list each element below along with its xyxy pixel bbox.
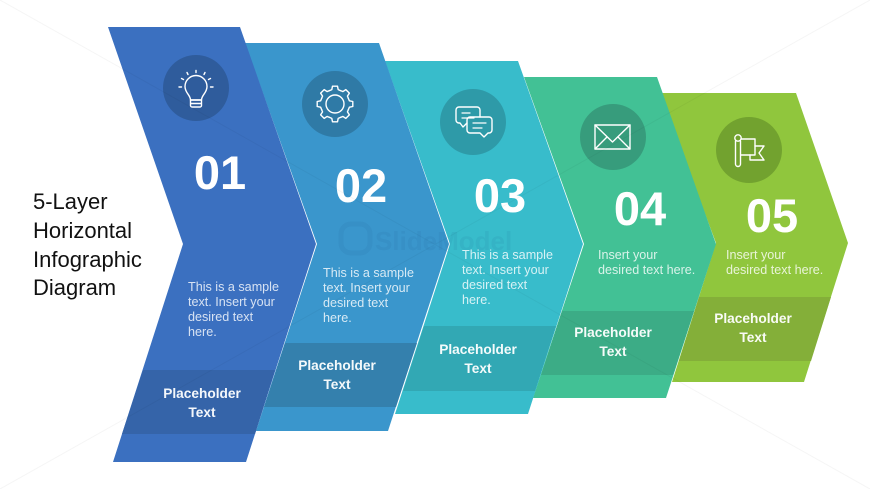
placeholder 04: Text [599, 344, 627, 359]
chevron 02 [245, 43, 449, 431]
body text 02: This is a sample [323, 266, 414, 280]
placeholder 02: Text [323, 377, 351, 392]
panel: layer 03 [385, 61, 583, 414]
body text 01: This is a sample [188, 280, 279, 294]
placeholder 04: Placeholder [574, 325, 652, 340]
body text 01: text. Insert your [188, 295, 275, 309]
panel: layer 05 [660, 93, 848, 382]
icon: light bulb [163, 55, 229, 121]
icon: flag [716, 117, 782, 183]
body text 03: desired text [462, 278, 528, 292]
chevron 01 [108, 27, 316, 462]
title: Infographic [33, 247, 142, 272]
body text 03: This is a sample [462, 248, 553, 262]
body text 04: desired text here. [598, 263, 695, 277]
icon: gear [302, 71, 368, 137]
panel: layer 04 [524, 77, 716, 398]
band 05 [679, 297, 831, 361]
body text 01: here. [188, 325, 217, 339]
number 05: 05 [746, 189, 798, 242]
chevron 04 [524, 77, 716, 398]
icon: chat bubbles [440, 89, 506, 155]
number 03: 03 [474, 169, 526, 222]
placeholder 05: Text [739, 330, 767, 345]
body text 05: Insert your [726, 248, 786, 262]
placeholder 03: Placeholder [439, 342, 517, 357]
placeholder 03: Text [464, 361, 492, 376]
body text 02: desired text [323, 296, 389, 310]
body text 03: text. Insert your [462, 263, 549, 277]
title: Horizontal [33, 218, 132, 243]
body text 02: here. [323, 311, 352, 325]
body text 02: text. Insert your [323, 281, 410, 295]
title: 5-Layer [33, 189, 108, 214]
body text 04: Insert your [598, 248, 658, 262]
band 03 [403, 326, 556, 391]
placeholder 01: Text [188, 405, 216, 420]
band 04 [541, 311, 694, 375]
panel: layer 01 [108, 27, 316, 462]
number 02: 02 [335, 159, 387, 212]
placeholder 05: Placeholder [714, 311, 792, 326]
body text 05: desired text here. [726, 263, 823, 277]
placeholder 02: Placeholder [298, 358, 376, 373]
band 01 [122, 370, 275, 434]
title: Diagram [33, 275, 116, 300]
panel: layer 02 [245, 43, 449, 431]
watermark: SlideModel [375, 226, 512, 256]
icon: envelope [580, 104, 646, 170]
chevron 03 [385, 61, 583, 414]
chevron 05 [660, 93, 848, 382]
body text 03: here. [462, 293, 491, 307]
number 04: 04 [614, 182, 666, 235]
body text 01: desired text [188, 310, 254, 324]
band 02 [264, 343, 417, 407]
placeholder 01: Placeholder [163, 386, 241, 401]
number 01: 01 [194, 146, 246, 199]
